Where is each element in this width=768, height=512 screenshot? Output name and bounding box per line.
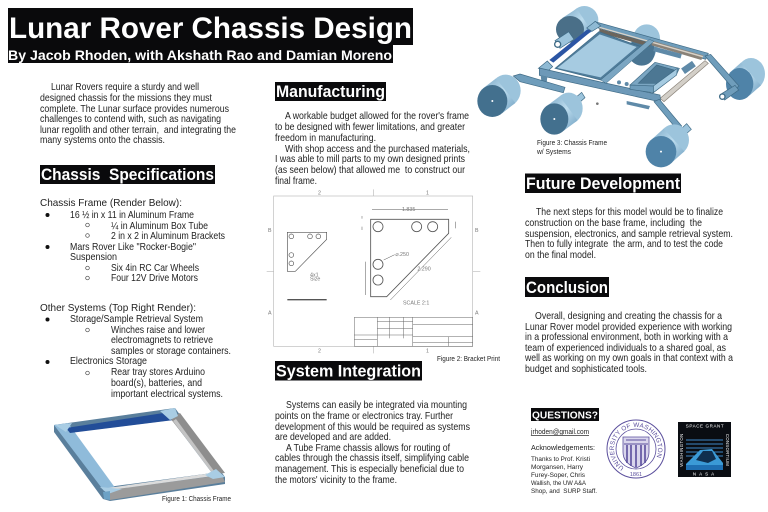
front right wheel xyxy=(646,124,691,167)
system integration text: development of this would be required as systems xyxy=(275,422,470,433)
other systems list: Storage/Sample Retrieval System xyxy=(70,314,203,325)
conclusion text: Overall, designing and creating the chassis for a xyxy=(535,311,722,322)
intro text: complete. The Lunar surface provides numerous xyxy=(40,104,229,115)
acknowledgements: Shop, and SURP Staff. xyxy=(531,488,597,495)
system integration text: the motors' vicinity to the frame. xyxy=(275,475,397,486)
intro text: challenges to contend with, such as navigating xyxy=(40,114,221,125)
system integration text: are developed and are added. xyxy=(275,432,391,443)
chassis spec list: Chassis Frame (Render Below): xyxy=(40,197,182,209)
storage tray xyxy=(630,62,679,93)
conclusion text: well as working on my own goals in that context with a xyxy=(524,353,733,364)
right wheel axle end xyxy=(720,94,725,99)
caption: figure 3 xyxy=(536,140,607,156)
authors: By Jacob Rhoden, with Akshath Rao and Damian Moreno xyxy=(8,47,392,63)
chassis spec list xyxy=(40,197,225,284)
other systems list: important electrical systems. xyxy=(111,389,223,400)
manufacturing text: A workable budget allowed for the rover's frame xyxy=(285,111,469,122)
chassis spec list: Six 4in RC Car Wheels xyxy=(111,263,199,274)
chassis spec list: 2 in x 2 in Aluminum Brackets xyxy=(111,231,225,242)
heading: manufacturing: Manufacturing xyxy=(276,82,385,101)
questions box: QUESTIONS? xyxy=(532,410,598,422)
figure 2: bracket drawing: B xyxy=(475,228,479,234)
other systems list: board(s), batteries, and xyxy=(111,378,202,389)
chassis frame xyxy=(538,21,708,109)
conclusion text: Lunar Rover model provided experience with working xyxy=(525,322,732,333)
chassis spec list: Mars Rover Like "Rocker-Bogie" xyxy=(70,242,196,253)
other systems list: Electronics Storage xyxy=(70,356,147,367)
figure 2: bracket drawing: 1 xyxy=(426,190,429,196)
figure 3: rover render xyxy=(477,6,765,167)
figure 2: bracket drawing: ⌀.250 xyxy=(395,252,409,258)
acknowledgements: Wallish, the UW A&A xyxy=(531,480,587,487)
future development text: construction on the base frame, including the xyxy=(525,218,702,229)
figure 2: bracket drawing: B xyxy=(268,228,272,234)
logo: Washington Space Grant Consortium xyxy=(678,422,731,477)
other systems list xyxy=(40,302,231,400)
rear left wheel xyxy=(555,6,598,48)
system integration text: A Tube Frame chassis allows for routing of xyxy=(286,443,450,454)
winches xyxy=(596,47,696,105)
figure 1: chassis frame render xyxy=(54,408,225,501)
right wheel xyxy=(726,58,765,100)
heading: system integration: System Integration xyxy=(276,362,421,380)
system integration text xyxy=(275,400,470,486)
figure 2: bracket drawing: A xyxy=(268,311,272,317)
chassis spec list: Suspension xyxy=(70,252,117,263)
other systems list: electromagnets to retrieve xyxy=(111,335,213,346)
manufacturing text: With shop access and the purchased materials, xyxy=(285,144,470,155)
intro text: many systems onto the chassis. xyxy=(40,135,165,146)
figure 2: bracket drawing: 1 xyxy=(426,348,429,354)
heading: future development: Future Development xyxy=(526,174,680,193)
system integration text: points on the frame or electronics tray. Further xyxy=(275,411,454,422)
conclusion text: in a professional environment, both in working with a xyxy=(525,332,728,343)
logo: University of Washington seal: 1861 xyxy=(630,472,642,478)
logo: University of Washington seal: UNIVERSITY OF WASHINGTON xyxy=(610,422,662,471)
conclusion text: team of experienced individuals to a shared goal, as xyxy=(525,343,726,354)
future development text: The next steps for this model would be to finalize xyxy=(536,207,723,218)
contact email: jrhoden@gmail.com xyxy=(530,429,589,436)
manufacturing text: freedom in manufacturing. xyxy=(275,133,376,144)
rear middle wheel xyxy=(628,24,660,66)
logo: Washington Space Grant Consortium: NASA xyxy=(693,472,717,476)
logo: Washington Space Grant Consortium: WASHINGTON xyxy=(679,433,684,467)
conclusion text xyxy=(524,311,733,375)
manufacturing text: to be designed with fewer limitations, and greater xyxy=(275,122,466,133)
manufacturing text: final frame. xyxy=(275,176,317,187)
logo: Washington Space Grant Consortium: CONSORTIUM xyxy=(725,434,730,466)
acknowledgements: Furey-Soper, Chris xyxy=(531,472,586,479)
figure 2: bracket drawing: 2 xyxy=(318,348,321,354)
title banner xyxy=(8,8,413,63)
intro text: designed chassis for the missions they must xyxy=(40,93,212,104)
manufacturing text xyxy=(275,111,470,187)
system integration text: cables through the chassis itself, simplifying cable xyxy=(275,453,469,464)
figure 2: bracket drawing: Size xyxy=(310,276,320,282)
caption: figure 1: Figure 1: Chassis Frame xyxy=(162,496,231,503)
figure 2: bracket drawing: 1.835 xyxy=(402,207,415,213)
other systems list: Other Systems (Top Right Render): xyxy=(40,302,196,314)
future development text: Then to fully integrate the arm, and to test the code xyxy=(525,239,723,250)
future development text: on the final model. xyxy=(525,250,596,261)
figure 2: bracket drawing: SCALE 2:1 xyxy=(403,300,429,306)
figure 2: bracket drawing xyxy=(267,189,480,354)
future development text xyxy=(525,207,733,261)
acknowledgements: Acknowledgements: xyxy=(531,443,595,452)
logo: Washington Space Grant Consortium: SPACE GRANT xyxy=(686,424,724,428)
chassis spec list: ¼ in Aluminum Box Tube xyxy=(111,220,208,232)
manufacturing text: I was able to mill parts to my own designed prints xyxy=(275,154,465,165)
acknowledgements xyxy=(531,443,597,495)
figure 2: bracket drawing: 2 xyxy=(318,190,321,196)
figure 2: bracket drawing: 4x1 xyxy=(310,273,319,279)
chassis spec list: 16 ½ in x 11 in Aluminum Frame xyxy=(70,210,194,221)
rocker arms xyxy=(513,54,739,130)
caption: figure 3: w/ Systems xyxy=(536,149,571,156)
payload plate xyxy=(555,32,654,83)
large bracket view xyxy=(362,209,455,300)
chassis spec list: Four 12V Drive Motors xyxy=(111,273,198,284)
system integration text: Systems can easily be integrated via mounting xyxy=(286,400,467,411)
heading: conclusion: Conclusion xyxy=(526,278,608,297)
manufacturing text: (as seen below) that allowed me to construct our xyxy=(275,165,466,176)
caption: figure 2: Figure 2: Bracket Print xyxy=(437,356,500,363)
heading: chassis specifications: Chassis Specifications xyxy=(41,165,214,184)
title: Lunar Rover Chassis Design xyxy=(9,12,412,45)
acknowledgements: Thanks to Prof. Kristi xyxy=(531,456,590,463)
intro text: lunar regolith and other terrain, and integrating the xyxy=(40,125,236,136)
front left wheel xyxy=(477,75,521,117)
small bracket view xyxy=(287,232,327,300)
figure 2: bracket drawing: A xyxy=(475,311,479,317)
front middle wheel xyxy=(540,92,585,135)
other systems list: Rear tray stores Arduino xyxy=(111,367,205,378)
acknowledgements: Morgansen, Harry xyxy=(531,464,584,471)
future development text: suspension, electronics, and sample retrieval system. xyxy=(525,229,733,240)
system integration text: management. This is especially beneficial due to xyxy=(275,464,464,475)
intro text xyxy=(40,82,236,146)
other systems list: samples or storage containers. xyxy=(111,346,231,357)
caption: figure 3: Figure 3: Chassis Frame xyxy=(537,140,607,147)
figure 2: bracket drawing: 2.290 xyxy=(417,267,431,273)
other systems list: Winches raise and lower xyxy=(111,325,206,336)
intro text: Lunar Rovers require a sturdy and well xyxy=(51,82,199,93)
title block xyxy=(354,317,473,346)
conclusion text: budget and sophisticated tools. xyxy=(525,364,647,375)
